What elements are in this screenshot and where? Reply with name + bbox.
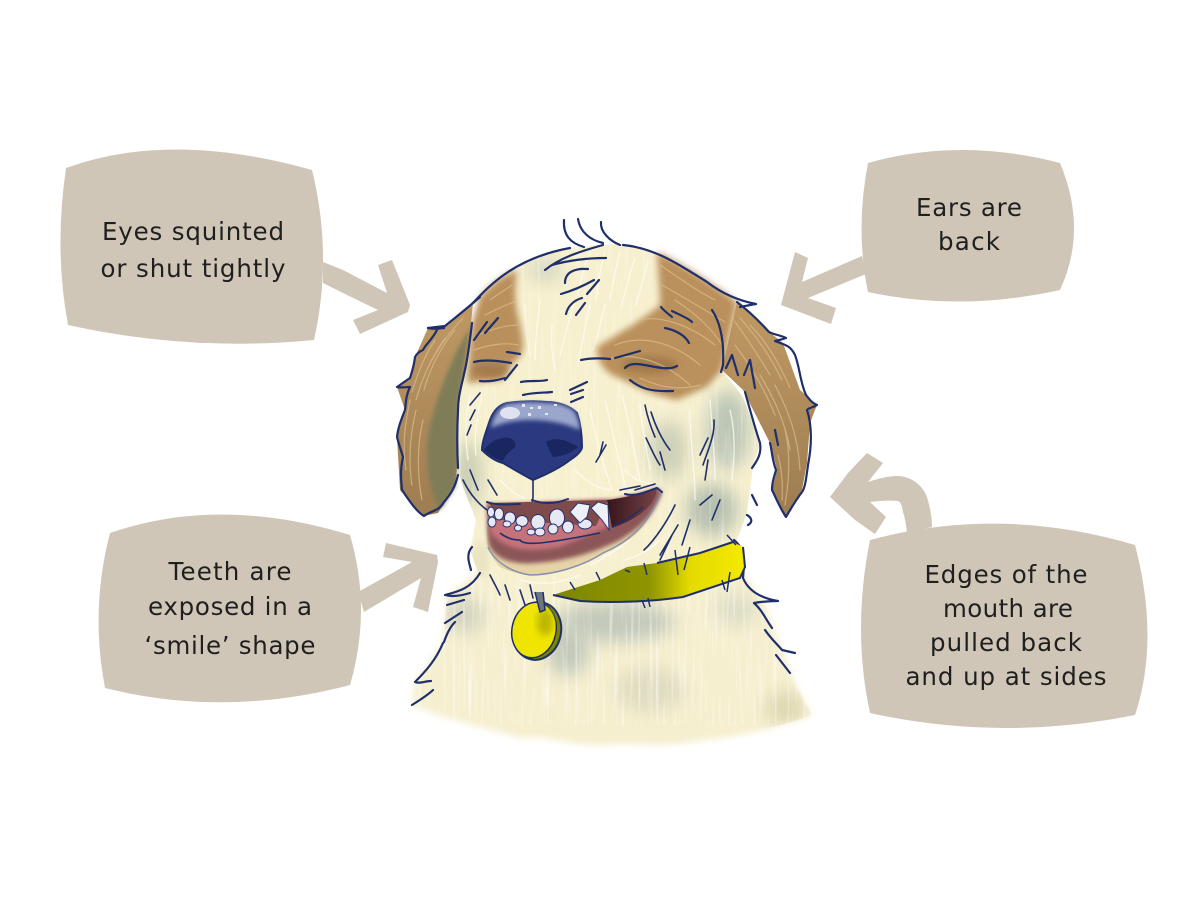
right ear (712, 302, 817, 517)
callout: eyes squinted: Eyes squinted (102, 217, 284, 246)
callout: edges of the mouth: Edges of the (924, 560, 1088, 589)
yellow collar (553, 535, 745, 608)
arrow: to ears (781, 252, 866, 324)
callout: ears back: Ears are (916, 193, 1022, 222)
callout: ears back: back (938, 227, 1001, 256)
fur tufts on top of head (545, 219, 620, 315)
callout: teeth exposed: exposed in a (148, 592, 312, 621)
callout: eyes squinted: or shut tightly (100, 254, 286, 283)
arrow: to eyes (323, 260, 410, 334)
whiskers and face fur lines (463, 393, 720, 605)
brown eye patches (467, 252, 737, 400)
dog neck and chest fur (410, 569, 813, 748)
teeth (488, 502, 609, 536)
arrow: to mouth edges (830, 453, 932, 534)
callout: edges of the mouth (861, 524, 1148, 728)
callout: edges of the mouth: pulled back (930, 628, 1083, 657)
callout: teeth exposed: Teeth are (168, 557, 292, 586)
arrow: to teeth (358, 543, 438, 612)
head fur (450, 240, 770, 590)
round yellow tag (507, 592, 567, 664)
callout: teeth exposed: ‘smile’ shape (144, 631, 316, 660)
illustration: smiling dog (397, 219, 820, 745)
callout: eyes squinted (60, 149, 323, 344)
infographic canvas (60, 150, 1148, 748)
head and ear outlines (397, 245, 817, 705)
callout: edges of the mouth: mouth are (943, 594, 1073, 623)
callout: edges of the mouth: and up at sides (906, 662, 1106, 691)
callout: teeth exposed (99, 514, 361, 702)
left ear (397, 303, 473, 516)
open mouth (487, 488, 662, 575)
closed eyes and brow lines (474, 307, 692, 402)
callout: ears back (862, 150, 1074, 302)
nose (482, 401, 582, 510)
